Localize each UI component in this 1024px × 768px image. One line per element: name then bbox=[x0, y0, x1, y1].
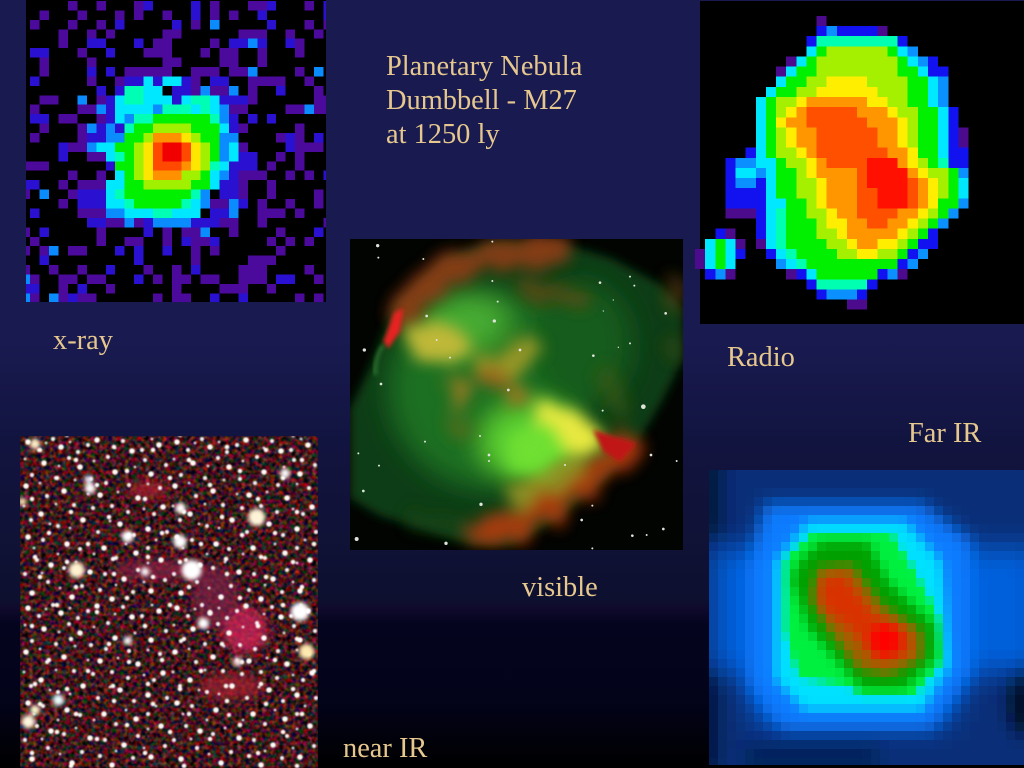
radio green band bbox=[715, 51, 958, 274]
x-ray red centre bbox=[163, 147, 182, 157]
x-ray cyan halo bbox=[96, 81, 238, 213]
x-ray blue pixels bbox=[21, 6, 333, 298]
nebula red outer arcs bbox=[402, 250, 678, 535]
far IR red upper lobe bbox=[820, 575, 910, 662]
nebula bright yellow-green lobes bbox=[402, 322, 605, 475]
radio red-orange core bbox=[806, 112, 918, 224]
x-ray green ring bbox=[115, 119, 219, 204]
label: Far IR: Far IR bbox=[908, 418, 981, 449]
label: near IR: near IR bbox=[343, 733, 427, 764]
nebula mid green glow bbox=[388, 282, 632, 488]
nebula stars bbox=[355, 241, 678, 549]
x-ray red-orange core bbox=[153, 147, 191, 166]
far IR brown inner lobes bbox=[812, 565, 922, 675]
radio mid-blue band bbox=[715, 31, 969, 295]
nebula dark green sphere bbox=[350, 242, 683, 545]
radio cyan band bbox=[705, 41, 969, 284]
near IR pink nebulosity bbox=[112, 482, 268, 700]
nebula faint shell strand bbox=[375, 345, 383, 375]
far IR bright blue shell bbox=[748, 503, 972, 728]
label: visible: visible bbox=[522, 572, 598, 603]
panel: radio image bbox=[695, 1, 1024, 324]
far IR cyan shell bbox=[775, 522, 950, 710]
panel: visible light image bbox=[350, 239, 683, 550]
radio purple fringe bbox=[695, 21, 969, 305]
title: Planetary Nebula Dumbbell - M27 at 1250 ly: at 1250 ly bbox=[386, 119, 500, 150]
radio aqua band bbox=[766, 41, 958, 284]
x-ray aqua ring bbox=[115, 91, 219, 213]
far IR dark green body bbox=[792, 542, 935, 688]
x-ray orange ring bbox=[153, 138, 191, 175]
near IR bright stars bbox=[18, 439, 314, 728]
x-ray yellow ring bbox=[144, 138, 200, 175]
title: Planetary Nebula Dumbbell - M27 at 1250 ly: Dumbbell - M27 bbox=[386, 85, 577, 116]
radio red peak bbox=[867, 163, 908, 203]
label: Radio: Radio bbox=[727, 342, 795, 373]
title: Planetary Nebula Dumbbell - M27 at 1250 ly bbox=[386, 51, 582, 150]
panel: far IR image bbox=[709, 470, 1024, 765]
far IR bright red peak bbox=[870, 625, 900, 655]
radio yellow-green band bbox=[776, 51, 948, 254]
radio orange band bbox=[786, 102, 928, 244]
far IR outer blue haze bbox=[715, 548, 1024, 725]
far IR dark corners bbox=[698, 458, 1024, 768]
x-ray mid-blue pixels bbox=[21, 25, 324, 298]
radio blue outline bbox=[695, 31, 969, 295]
x-ray yellow-green ring bbox=[134, 128, 210, 185]
near IR dark red speckle bbox=[20, 436, 318, 768]
radio yellow band bbox=[776, 82, 938, 254]
nebula vivid red spots bbox=[383, 308, 637, 462]
x-ray purple noise pixels bbox=[21, 6, 333, 298]
near IR star field bbox=[20, 436, 318, 768]
label: x-ray: x-ray bbox=[53, 325, 113, 356]
title: Planetary Nebula Dumbbell - M27 at 1250 ly: Planetary Nebula bbox=[386, 51, 582, 82]
panel: x-ray image bbox=[26, 0, 326, 302]
far IR green body bbox=[785, 533, 942, 697]
panel: near IR image bbox=[20, 436, 318, 768]
